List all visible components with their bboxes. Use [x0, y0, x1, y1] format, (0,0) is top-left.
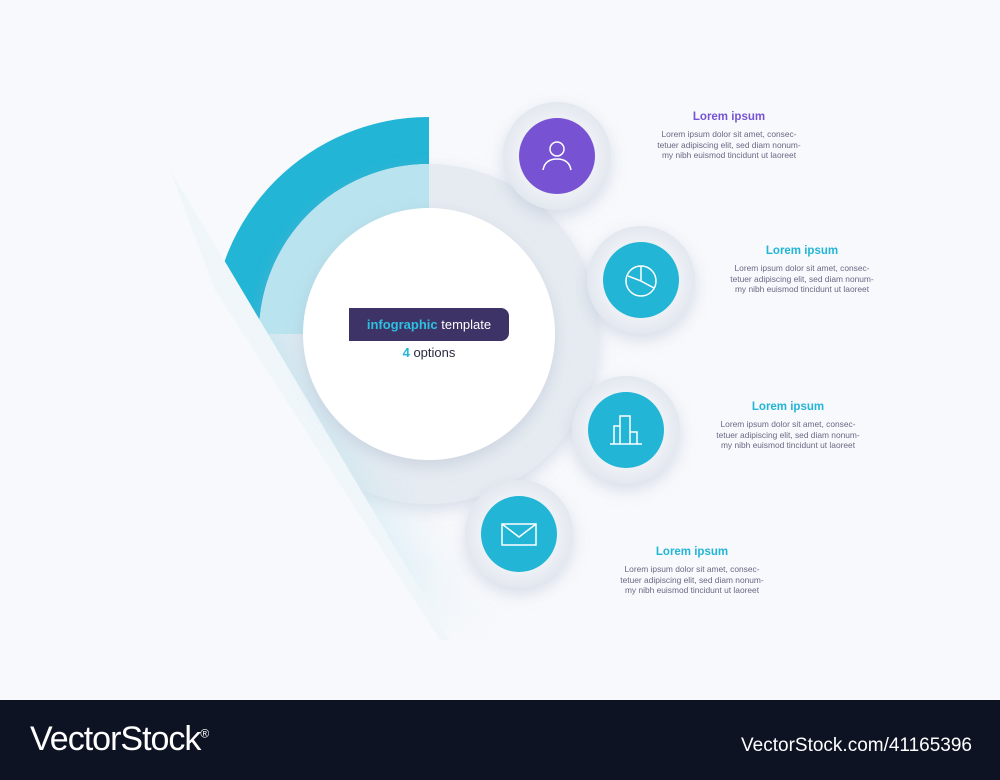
footer bar: VectorStock.com/41165396 — [741, 735, 972, 756]
text block 4: tetuer adipiscing elit, sed diam nonum- — [620, 574, 764, 584]
text block 3: Lorem ipsum — [752, 401, 824, 413]
text block 1: Lorem ipsum — [693, 111, 765, 123]
main graphic — [224, 102, 700, 606]
icon 2: pie — [587, 226, 695, 334]
text block 2: tetuer adipiscing elit, sed diam nonum- — [730, 274, 874, 284]
icon 4: envelope — [465, 480, 573, 588]
text block 1: Lorem ipsum dolor sit amet, consec- — [662, 129, 796, 139]
text block 1: my nibh euismod tincidunt ut laoreet — [662, 150, 796, 160]
text block 4: Lorem ipsum dolor sit amet, consec- — [624, 564, 759, 574]
text block 3 — [716, 401, 860, 450]
footer bar — [0, 700, 1000, 780]
text block 3: Lorem ipsum dolor sit amet, consec- — [720, 419, 855, 429]
center circle — [303, 208, 555, 460]
outer ring — [259, 164, 599, 640]
text block 1 — [657, 111, 801, 160]
footer bar: VectorStock® — [30, 720, 208, 758]
options text: 4 options — [403, 345, 455, 360]
text block 2: Lorem ipsum dolor sit amet, consec- — [734, 263, 869, 273]
center label: infographic template — [367, 317, 491, 332]
text block 3: my nibh euismod tincidunt ut laoreet — [721, 440, 855, 450]
icon 1: person — [503, 102, 611, 210]
text block 4: my nibh euismod tincidunt ut laoreet — [625, 585, 759, 595]
text block 1: tetuer adipiscing elit, sed diam nonum- — [657, 140, 801, 150]
faint side shadow band — [170, 170, 450, 640]
icon 3: buildings — [572, 376, 680, 484]
text block 3: tetuer adipiscing elit, sed diam nonum- — [716, 430, 860, 440]
cyan outer arc — [224, 117, 429, 320]
text block 4 — [620, 546, 764, 595]
text block 2: my nibh euismod tincidunt ut laoreet — [735, 284, 869, 294]
text block 2 — [730, 245, 874, 294]
text block 2: Lorem ipsum — [766, 245, 838, 257]
text block 4: Lorem ipsum — [656, 546, 728, 558]
center label — [349, 308, 509, 341]
